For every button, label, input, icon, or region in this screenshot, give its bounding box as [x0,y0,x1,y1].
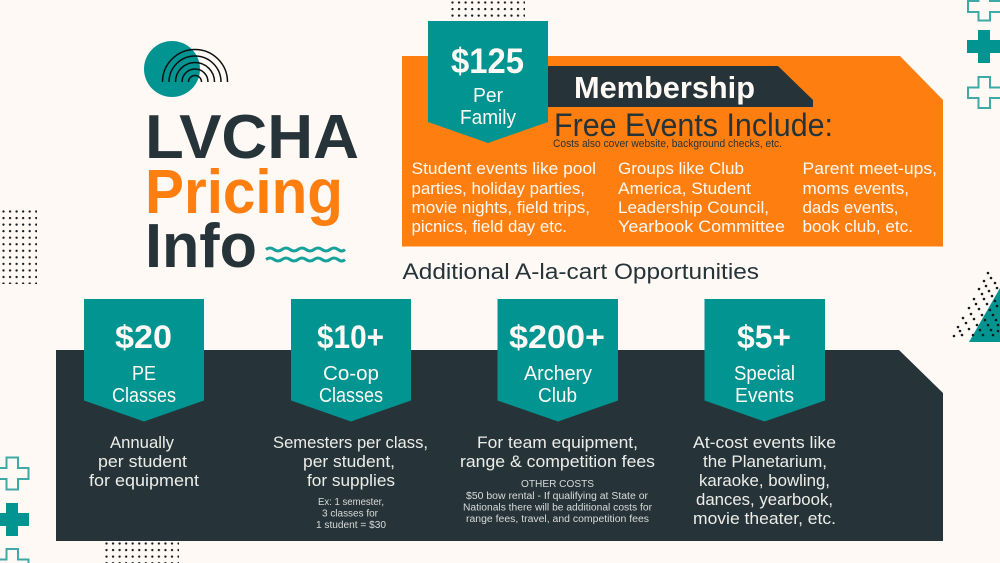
card: special events: Events [735,384,794,407]
list: parents: moms events, [802,179,909,198]
card: PE classes: $20 [115,319,172,355]
icon: bottom left crosses [0,458,29,563]
card: PE classes: PE [132,362,156,385]
card: PE classes: for equipment [89,471,199,490]
card: archery club: Nationals there will be additional costs for [463,502,653,514]
card: co-op classes: Semesters per class, [273,433,428,452]
list: groups: Leadership Council, [618,198,769,217]
list: groups: Yearbook Committee [618,217,785,236]
card: co-op classes [273,299,428,531]
list: student events: parties, holiday parties, [412,179,585,198]
icon: logo circle with arcs [144,41,228,97]
card: special events: movie theater, etc. [693,509,836,528]
card: archery club [460,299,655,525]
card: archery club: $200+ [509,319,605,355]
title: Info [145,212,257,281]
costs note: Costs also cover website, background checks, etc. [553,138,782,150]
list: student events: picnics, field day etc. [412,217,567,236]
icon: top right crosses [967,0,1000,108]
membership heading bar [548,66,813,107]
card: archery club: Archery [524,362,593,385]
panel: membership [402,21,943,246]
card: PE classes: Classes [112,384,176,407]
dot grid: left [2,210,37,284]
card: co-op classes: Co-op [323,362,379,385]
card: archery club: $50 bow rental - If qualifying at State or [466,491,649,502]
card: co-op classes: 1 student = $30 [316,520,386,531]
card: co-op classes: for supplies [307,471,395,490]
card: archery club: range & competition fees [460,452,655,471]
list: parents: dads events, [802,198,898,217]
card: co-op classes: 3 classes for [322,508,379,520]
heading: additional opportunities: Additional A-la-cart Opportunities [402,259,759,284]
card: special events: karaoke, bowling, [699,471,830,490]
card: co-op classes: Ex: 1 semester, [318,497,384,508]
card: archery club: Club [538,384,577,407]
price badge: $125 [428,21,548,143]
icon: dotted teal triangle [953,272,1000,342]
title [145,103,359,281]
card: PE classes: per student [98,452,187,471]
card: archery club: OTHER COSTS [521,479,594,490]
card: archery club: range fees, travel, and competition fees [466,514,649,525]
list: student events: Student events like pool [412,159,596,178]
card: co-op classes: Classes [319,384,383,407]
list: groups: America, Student [618,179,751,198]
card: co-op classes: $10+ [317,319,384,355]
title: Pricing [145,158,343,227]
list: student events [412,159,596,236]
card: special events: $5+ [737,319,791,355]
list: groups: Groups like Club [618,159,744,178]
card: archery club: For team equipment, [477,433,638,452]
list: groups [618,159,785,236]
price badge: $125: Family [460,107,516,129]
price badge: $125: $125 [451,42,524,81]
card: special events: the Planetarium, [703,452,827,471]
price badge: $125: Per [473,85,503,107]
membership heading bar: Membership [574,70,755,105]
list: parents: Parent meet-ups, [802,159,937,178]
title: LVCHA [145,103,359,172]
dot grid: top [451,0,525,21]
list: parents: book club, etc. [802,217,913,236]
list: parents [802,159,937,236]
card: special events: dances, yearbook, [696,490,833,509]
list: student events: movie nights, field trips, [412,198,590,217]
card: special events [693,299,836,528]
card: special events: At-cost events like [693,433,836,452]
card: PE classes [84,299,204,490]
dot grid: bottom [105,542,179,563]
card: special events: Special [734,362,795,385]
free events heading: Free Events Include: [554,107,833,143]
icon: waves [266,248,345,261]
panel: a-la-cart [56,299,943,541]
card: PE classes: Annually [110,433,174,452]
card: co-op classes: per student, [303,452,395,471]
